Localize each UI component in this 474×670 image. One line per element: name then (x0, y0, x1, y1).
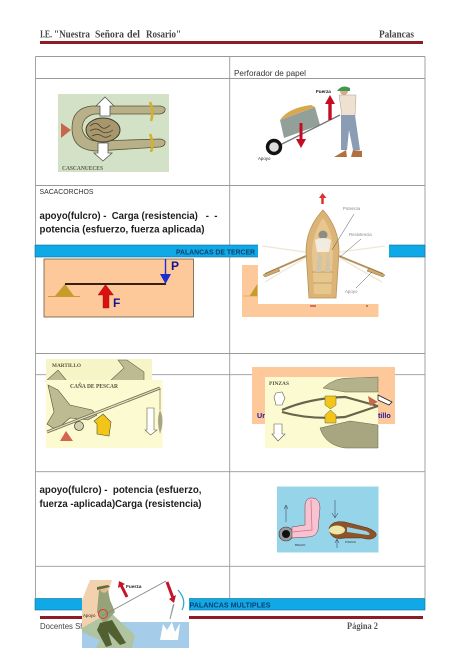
section band: palancas de tercer género (35, 245, 425, 257)
image: carretilla con fuerza y apoyo (258, 87, 362, 161)
diagram: palanca con P y F (44, 259, 194, 317)
image: caña de pescar (46, 380, 162, 448)
section band: palancas múltiples (35, 598, 425, 610)
image: carretilla con fuerza y apoyo: Fuerza (316, 89, 331, 94)
table grid (36, 56, 425, 598)
text block: orden de la palanca de segundo género: potencia (esfuerzo, fuerza aplicada) (40, 224, 204, 236)
page header: "Nuestra (54, 30, 90, 40)
image: bote de remos: Resistencia (349, 232, 372, 237)
page header: I.E. (40, 30, 52, 40)
image: cascanueces: CASCANUECES (62, 166, 104, 172)
image: pescador con caña: Fuerza (126, 584, 142, 590)
page footer: Página 2 (347, 621, 378, 631)
page footer (40, 616, 423, 631)
image: caña de pescar: CAÑA DE PESCAR (70, 382, 119, 390)
image: pescador con caña: Apoyo (83, 613, 96, 618)
section band: palancas de tercer género: PALANCAS DE TERCER (176, 248, 255, 256)
text block: orden de la palanca de tercer género: apoyo(fulcro) - potencia (esfuerzo, (40, 485, 202, 496)
page header (40, 30, 423, 44)
image: pinzas: PINZAS (269, 381, 289, 387)
cell label: sacacorchos: SACACORCHOS (40, 187, 94, 196)
image: brazo y pinzas: BRAZO (295, 543, 306, 547)
text block: orden de la palanca de tercer género: fuerza -aplicada)Carga (resistencia) (40, 499, 202, 510)
image: pinzas (265, 377, 392, 448)
text block: orden de la palanca de segundo género (40, 211, 218, 236)
image: bote de remos: Potencia (343, 206, 361, 211)
diagram: palanca peach con texto parcialmente oculto: tillo (378, 411, 391, 420)
section band: palancas múltiples: PALANCAS MULTIPLES (190, 600, 270, 610)
image: martillo (46, 359, 152, 381)
image: bote de remos (258, 189, 389, 304)
image: bote de remos: Apoyo (345, 289, 358, 294)
text block: orden de la palanca de segundo género: apoyo(fulcro) - Carga (resistencia) - - (40, 211, 218, 222)
cell label: Perforador de papel: Perforador de papel (234, 69, 306, 78)
diagram: palanca recubierta por el bote (242, 265, 378, 317)
page header: Palancas (379, 30, 414, 40)
image: pescador con caña (82, 579, 189, 648)
page header: del (127, 30, 140, 40)
image: cascanueces (58, 94, 169, 172)
image: brazo y pinzas (277, 486, 378, 552)
image: martillo: MARTILLO (52, 363, 82, 369)
image: brazo y pinzas: PINZAS (345, 540, 356, 544)
diagram: palanca peach con texto parcialmente oculto: Ur (257, 411, 265, 420)
page header: Señora (95, 30, 124, 40)
page footer: Docentes Sh (40, 622, 85, 631)
image: carretilla con fuerza y apoyo: Apoyo (258, 156, 271, 161)
diagram: palanca con P y F: P (171, 259, 179, 273)
page header: Rosario" (146, 30, 181, 40)
diagram: palanca con P y F: F (113, 296, 120, 310)
diagram: palanca peach con texto parcialmente oculto (252, 367, 395, 424)
text block: orden de la palanca de tercer género (40, 485, 202, 510)
